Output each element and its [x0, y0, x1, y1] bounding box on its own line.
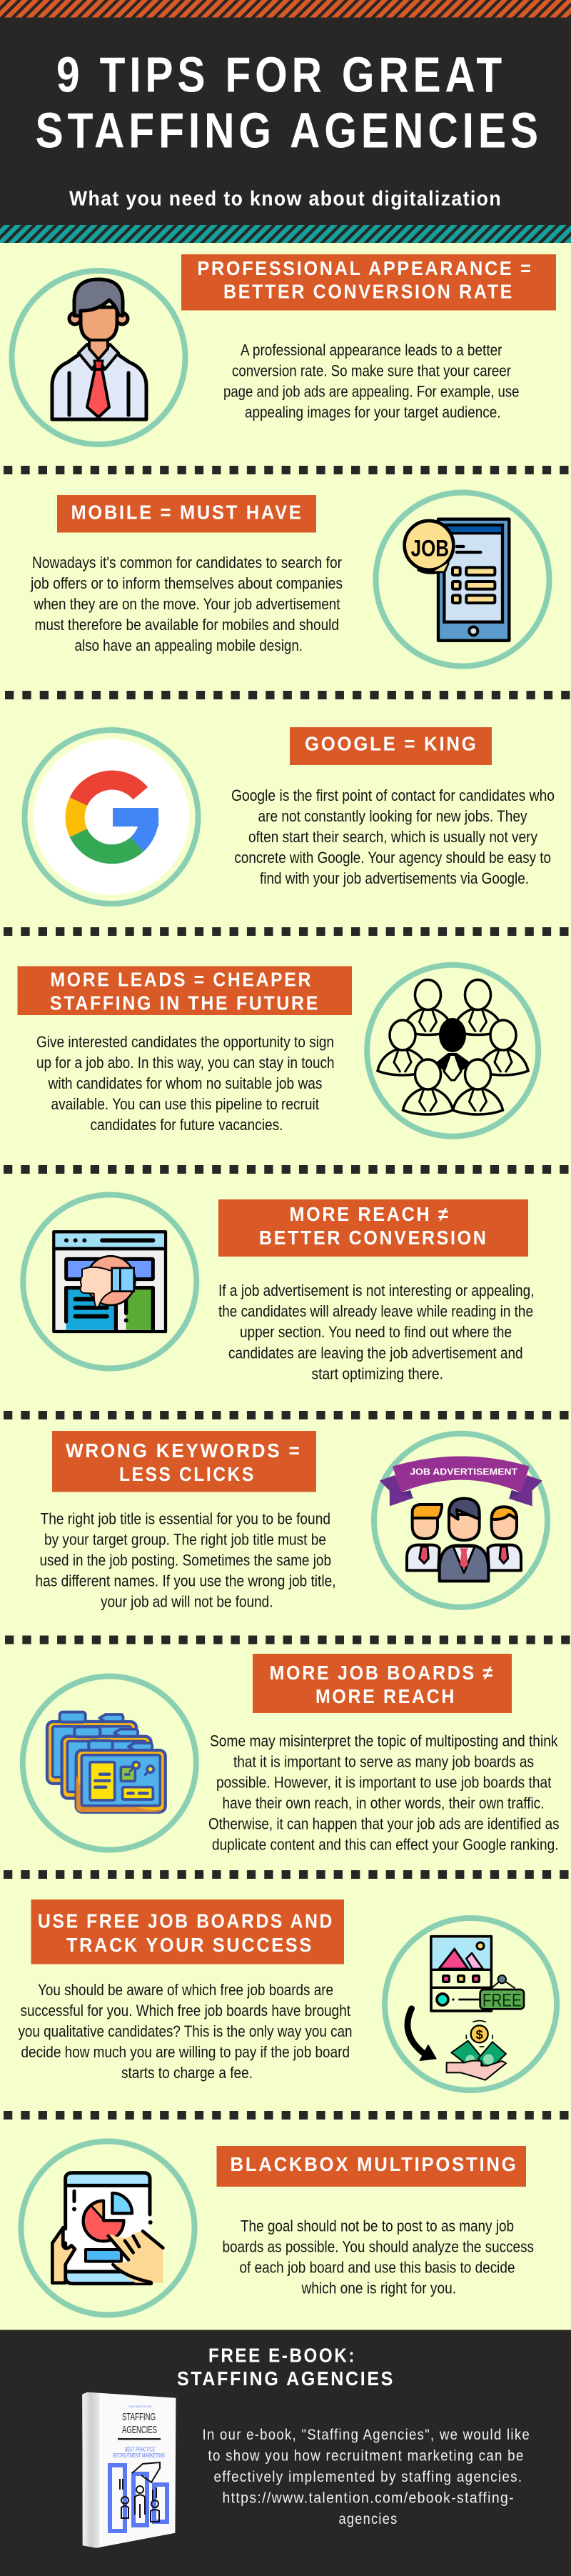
heading: WRONG KEYWORDS =: [66, 1439, 301, 1462]
body text: The right job title is essential for you to be found: [40, 1510, 330, 1527]
body text: A professional appearance leads to a better: [241, 341, 502, 359]
body text: start optimizing there.: [311, 1364, 443, 1383]
body text: find with your job advertisements via Google.: [260, 869, 529, 887]
heading: [218, 1199, 528, 1257]
icon: e-book cover: WWW.TALENTION.COM: [128, 2405, 151, 2408]
icon: e-book cover: AGENCIES: [122, 2424, 157, 2436]
body text: candidates for future vacancies.: [90, 1116, 283, 1134]
heading: [52, 1431, 316, 1492]
panel: free job boards: [19, 1899, 557, 2090]
icon: e-book cover: STAFFING: [122, 2411, 156, 2423]
icon: browser with thumbs down: [23, 1194, 196, 1369]
body text: up for a job abo. In this way, you can stay in touch: [36, 1054, 334, 1072]
footer heading: [177, 2345, 395, 2390]
heading: BETTER CONVERSION: [259, 1227, 488, 1249]
body text: conversion rate. So make sure that your career: [232, 361, 511, 380]
icon: businessman: [11, 271, 186, 444]
body text: when they are on the move. Your job advertisement: [34, 595, 340, 613]
heading: [217, 2146, 526, 2187]
body text: [19, 1981, 353, 2082]
body text: upper section. You need to find out where the: [240, 1323, 512, 1341]
footer text: effectively implemented by staffing agencies.: [214, 2468, 522, 2485]
footer heading: STAFFING AGENCIES: [177, 2367, 395, 2390]
title: [36, 47, 542, 159]
heading: MORE REACH: [315, 1685, 456, 1707]
heading: USE FREE JOB BOARDS AND: [38, 1910, 334, 1932]
icon: free listing to money: $: [476, 2027, 483, 2042]
body text: [218, 1282, 534, 1383]
heading: MORE JOB BOARDS ≠: [270, 1662, 495, 1684]
body text: The goal should not be to post to as many job: [241, 2217, 514, 2235]
heading: LESS CLICKS: [119, 1463, 256, 1485]
icon: team network: [367, 965, 538, 1137]
panel: mobile: [30, 493, 549, 666]
body text: starts to charge a fee.: [121, 2064, 253, 2082]
heading: PROFESSIONAL APPEARANCE =: [197, 257, 532, 279]
body text: [231, 787, 555, 887]
heading: [17, 966, 352, 1015]
body text: [208, 1732, 560, 1853]
panel: google: [24, 727, 555, 904]
icon: e-book cover: RECRUITMENT MARKETING: [113, 2452, 165, 2459]
body text: appealing images for your target audience.: [245, 403, 501, 421]
icon: tablet with pie chart: [21, 2142, 194, 2315]
body text: [36, 1510, 335, 1610]
body text: [30, 554, 343, 654]
body text: used in the job posting. Sometimes the same job: [40, 1552, 331, 1569]
panel: professional appearance: [11, 254, 556, 444]
heading: TRACK YOUR SUCCESS: [66, 1934, 313, 1956]
body text: by your target group. The right job title must be: [44, 1530, 326, 1549]
body text: which one is right for you.: [301, 2279, 456, 2297]
body text: with candidates for whom no suitable job was: [48, 1074, 322, 1092]
heading: BLACKBOX MULTIPOSTING: [230, 2153, 518, 2175]
body text: available. You can use this pipeline to recruit: [51, 1095, 320, 1113]
body text: candidates are leaving the job advertisement and: [228, 1344, 522, 1362]
body text: [223, 341, 520, 421]
heading: GOOGLE = KING: [305, 733, 478, 754]
panel: blackbox multiposting: [21, 2142, 534, 2315]
footer text: https://www.talention.com/ebook-staffing-: [223, 2489, 515, 2506]
body text: successful for you. Which free job boards have brought: [20, 2002, 351, 2020]
heading: [57, 495, 316, 533]
body text: are not constantly looking for new jobs. They: [258, 807, 527, 825]
footer text: to show you how recruitment marketing can be: [208, 2447, 524, 2465]
body text: job offers or to inform themselves about companies: [30, 574, 343, 592]
panel: more leads: [17, 965, 538, 1137]
heading: MOBILE = MUST HAVE: [71, 501, 303, 523]
subtitle: What you need to know about digitalization: [69, 187, 502, 210]
heading: [253, 1654, 512, 1713]
body text: has different names. If you use the wrong job title,: [36, 1572, 335, 1590]
body text: of each job board and use this basis to decide: [240, 2259, 515, 2276]
icon: free listing to money: [385, 1918, 557, 2090]
panel: wrong keywords: [36, 1431, 547, 1610]
heading: [290, 727, 492, 765]
icon: job advertisement team: [374, 1434, 547, 1607]
body text: You should be aware of which free job boards are: [38, 1981, 333, 1999]
header banner: [0, 0, 571, 243]
body text: Give interested candidates the opportunity to sign: [36, 1033, 334, 1051]
body text: [36, 1033, 334, 1134]
body text: must therefore be available for mobiles and should: [34, 616, 339, 634]
body text: [223, 2217, 534, 2297]
icon: e-book cover: [82, 2392, 176, 2548]
icon: job boards: [23, 1676, 196, 1850]
icon: phone with job bubble: JOB: [411, 534, 449, 561]
heading: MORE REACH ≠: [290, 1203, 450, 1225]
heading: BETTER CONVERSION RATE: [223, 280, 514, 303]
heading: STAFFING IN THE FUTURE: [50, 992, 320, 1014]
body text: your job ad will not be found.: [101, 1593, 273, 1610]
panel: free e-book footer: [0, 2330, 571, 2576]
body text: Nowadays it's common for candidates to search for: [32, 554, 342, 571]
body text: you qualitative candidates? This is the only way you can: [19, 2022, 353, 2040]
icon: job advertisement team: JOB ADVERTISEMENT: [410, 1467, 517, 1477]
panel: more reach: [23, 1194, 535, 1383]
heading: [31, 1899, 344, 1965]
icon: e-book cover: BEST PRACTICE: [125, 2446, 155, 2453]
body text: page and job ads are appealing. For example, use: [223, 383, 520, 400]
heading: MORE LEADS = CHEAPER: [50, 969, 313, 990]
heading: [181, 254, 556, 310]
panel: more job boards: [23, 1654, 560, 1853]
footer heading: FREE E-BOOK:: [208, 2345, 356, 2366]
footer text: [203, 2426, 530, 2527]
body text: decide how much you are willing to pay if the job board: [21, 2043, 350, 2061]
icon: phone with job bubble: [375, 493, 550, 666]
footer text: agencies: [338, 2510, 398, 2527]
icon: google logo: [24, 730, 198, 904]
body text: also have an appealing mobile design.: [74, 636, 303, 654]
icon: free listing to money: FREE: [482, 1992, 522, 2011]
